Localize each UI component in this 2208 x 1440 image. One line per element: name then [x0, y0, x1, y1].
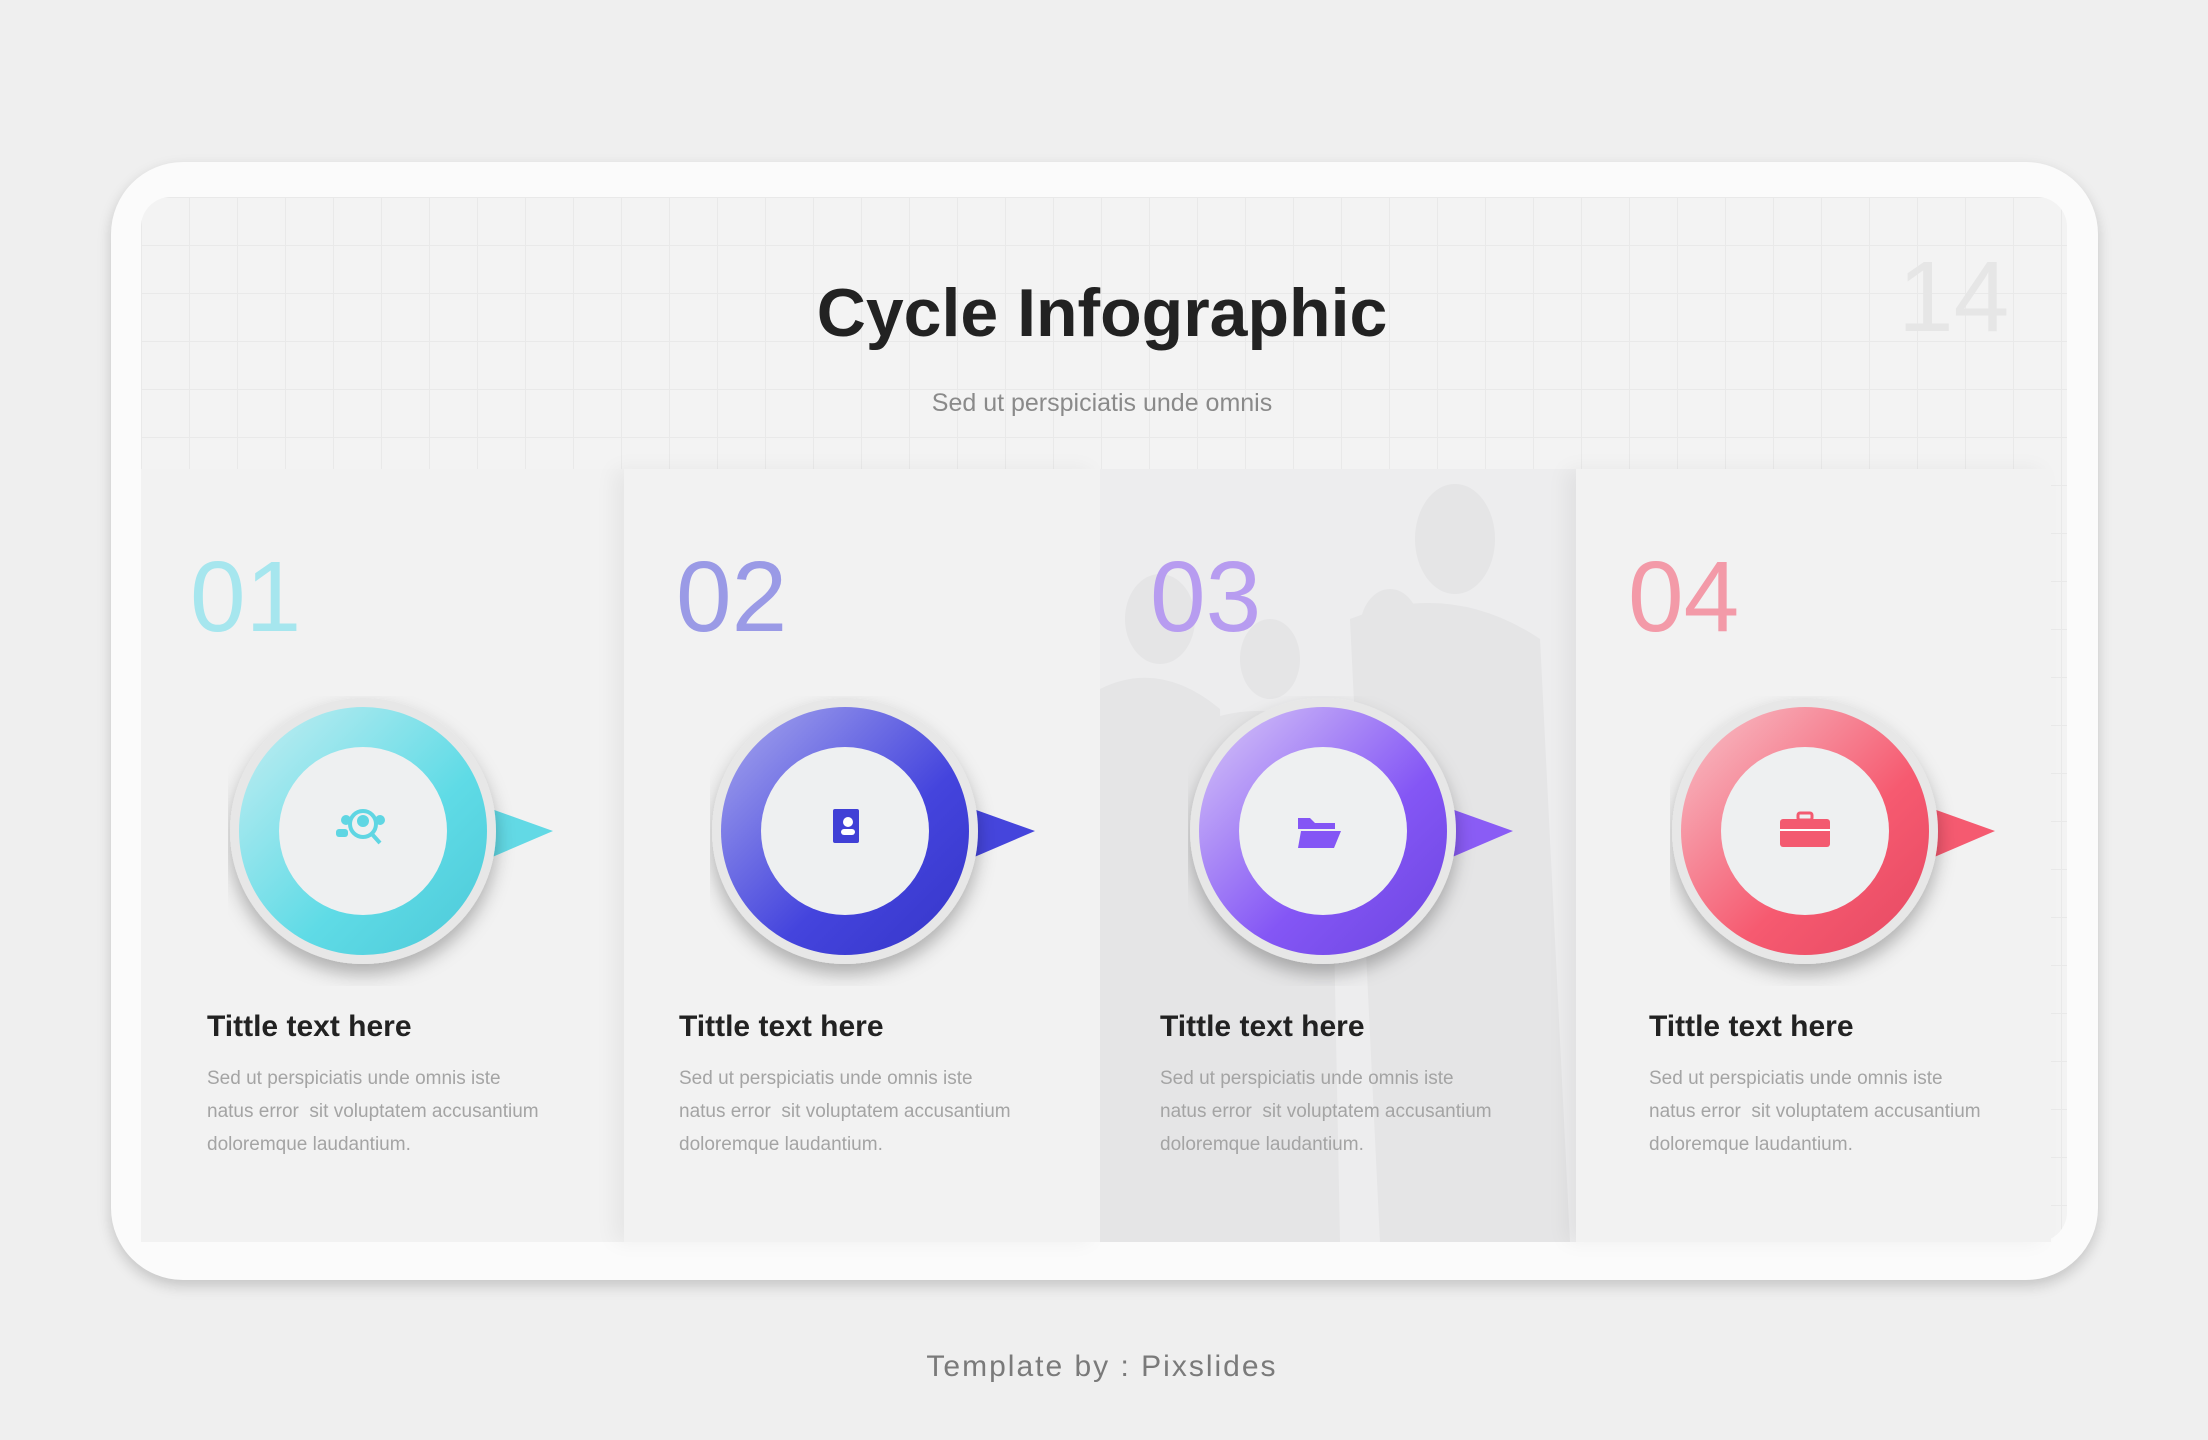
icon: briefcase [1780, 813, 1830, 847]
column 4 [1576, 469, 2051, 1242]
text: natus error sit voluptatem accusantium [207, 1101, 539, 1122]
circle 1 [228, 698, 553, 984]
text: Sed ut perspiciatis unde omnis iste [1160, 1068, 1454, 1089]
inner panel with grid [141, 197, 2067, 1242]
column 1 [141, 469, 624, 1242]
text: natus error sit voluptatem accusantium [679, 1101, 1011, 1122]
text 4: Tittle text here [1649, 1010, 1854, 1043]
circle 4 [1670, 698, 1995, 984]
column 3 photo [1100, 469, 1576, 1242]
number 03: 03 [1150, 541, 1261, 653]
text: Sed ut perspiciatis unde omnis iste [1649, 1068, 1943, 1089]
text 1: Tittle text here [207, 1010, 412, 1043]
column 2 [624, 469, 1100, 1242]
subtitle: Sed ut perspiciatis unde omnis [932, 389, 1272, 417]
number 04: 04 [1628, 541, 1739, 653]
text 2: Tittle text here [679, 1010, 884, 1043]
text: Sed ut perspiciatis unde omnis iste [679, 1068, 973, 1089]
text: doloremque laudantium. [1649, 1134, 1853, 1155]
page number: 14 [1898, 241, 2009, 353]
circle 2 [710, 698, 1035, 984]
text: doloremque laudantium. [207, 1134, 411, 1155]
footer: Template by : Pixslides [926, 1350, 1278, 1383]
text: natus error sit voluptatem accusantium [1160, 1101, 1492, 1122]
text: natus error sit voluptatem accusantium [1649, 1101, 1981, 1122]
number 02: 02 [676, 541, 787, 653]
text: doloremque laudantium. [1160, 1134, 1364, 1155]
icon: contact book [833, 809, 859, 843]
title: Cycle Infographic [817, 275, 1387, 351]
text 3: Tittle text here [1160, 1010, 1365, 1043]
card frame [111, 162, 2098, 1280]
icon: folder [1298, 818, 1341, 848]
number 01: 01 [190, 541, 301, 653]
text: Sed ut perspiciatis unde omnis iste [207, 1068, 501, 1089]
text: doloremque laudantium. [679, 1134, 883, 1155]
circle 3 [1188, 707, 1513, 984]
icon: user search [336, 811, 385, 843]
